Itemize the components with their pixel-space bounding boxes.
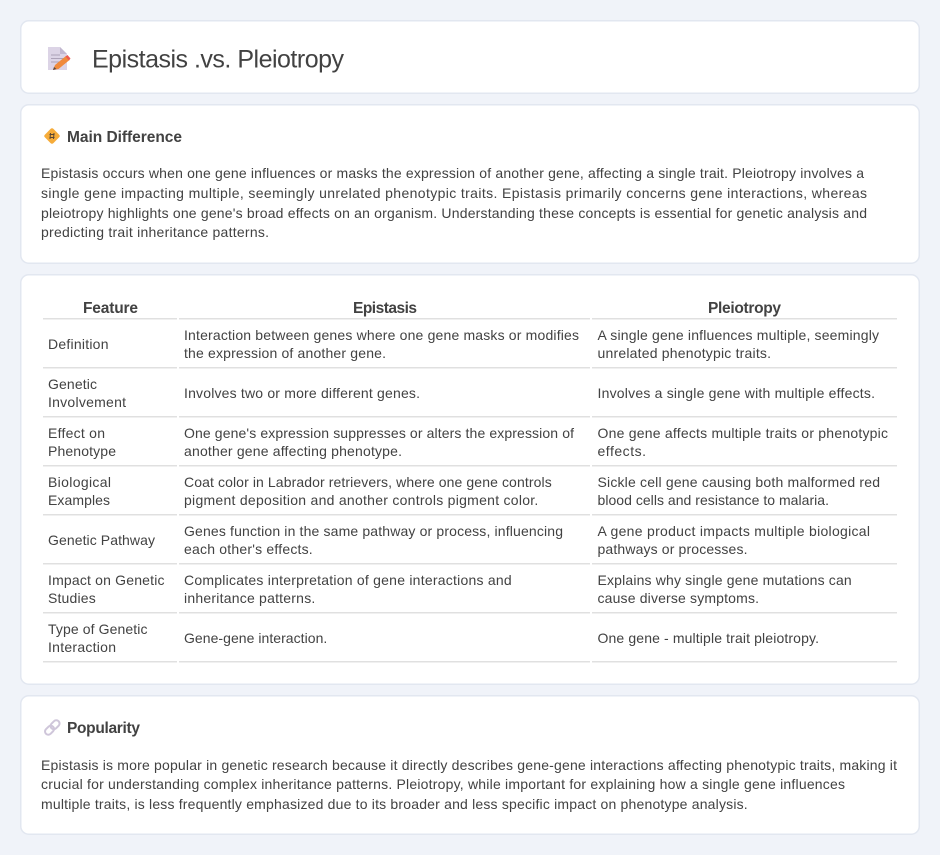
row: definition: Interaction between genes where one gene masks or modifies — [184, 327, 579, 343]
row: biological examples — [48, 474, 880, 508]
title: Epistasis .vs. Pleiotropy — [92, 46, 344, 74]
row: genetic pathway: A gene product impacts multiple biological — [598, 523, 870, 539]
table header: Epistasis — [353, 300, 417, 317]
row: definition: the expression of another gene. — [184, 345, 386, 361]
row: type of genetic interaction — [48, 621, 819, 655]
row: genetic involvement: Involves a single gene with multiple effects. — [598, 385, 875, 401]
icon: chain link — [44, 719, 61, 736]
row: genetic pathway — [48, 523, 870, 557]
row: definition — [48, 327, 879, 361]
row: genetic pathway: each other's effects. — [184, 541, 313, 557]
row: biological examples: Examples — [48, 492, 110, 508]
row: effect on phenotype — [48, 425, 888, 459]
text block: popularity — [41, 757, 897, 812]
row: genetic involvement: Involvement — [48, 394, 126, 410]
table header: Pleiotropy — [708, 300, 781, 317]
row: type of genetic interaction: Type of Genetic — [48, 621, 148, 637]
table header: Feature — [83, 300, 138, 317]
row: biological examples: Coat color in Labrador retrievers, where one gene controls — [184, 474, 552, 490]
heading: popularity: Popularity — [67, 720, 140, 737]
row: genetic pathway: Genetic Pathway — [48, 532, 155, 548]
row: definition: Definition — [48, 336, 108, 352]
row: definition: A single gene influences multiple, seemingly — [598, 327, 879, 343]
text block: main difference: pleiotropy highlights one gene's broad effects on an organism. Understanding these concepts is essential for genetic analysis and — [41, 205, 867, 221]
row: biological examples: blood cells and resistance to malaria. — [598, 492, 829, 508]
row: impact on genetic studies: inheritance patterns. — [184, 590, 315, 606]
row: type of genetic interaction: One gene - multiple trait pleiotropy. — [598, 630, 819, 646]
row: genetic pathway: Genes function in the same pathway or process, influencing — [184, 523, 563, 539]
row: biological examples: pigment deposition and another controls pigment color. — [184, 492, 538, 508]
panel: comparison table — [21, 275, 919, 684]
row: effect on phenotype: another gene affecting phenotype. — [184, 443, 402, 459]
row: biological examples: Sickle cell gene causing both malformed red — [598, 474, 880, 490]
text block: main difference — [41, 165, 867, 240]
row: genetic involvement: Genetic — [48, 376, 97, 392]
table header — [83, 300, 781, 317]
row: effect on phenotype: Effect on — [48, 425, 105, 441]
row: effect on phenotype: effects. — [598, 443, 646, 459]
row: genetic involvement — [48, 376, 875, 410]
table rules — [43, 318, 897, 662]
text block: popularity: Epistasis is more popular in genetic research because it directly describes gene-gene interactions affecting phenotypic traits, making it — [41, 757, 897, 773]
text block: popularity: crucial for understanding complex inheritance patterns. Pleiotropy, while important for explaining how a single gene influences — [41, 776, 845, 792]
row: effect on phenotype: One gene's expression suppresses or alters the expression of — [184, 425, 574, 441]
row: impact on genetic studies: cause diverse symptoms. — [598, 590, 759, 606]
row: biological examples: Biological — [48, 474, 111, 490]
row: impact on genetic studies: Studies — [48, 590, 96, 606]
icon: document with pencil — [48, 47, 70, 70]
row: effect on phenotype: One gene affects multiple traits or phenotypic — [598, 425, 888, 441]
panel: header — [21, 21, 919, 93]
heading: main difference: Main Difference — [67, 129, 182, 146]
row: impact on genetic studies: Impact on Genetic — [48, 572, 164, 588]
row: definition: unrelated phenotypic traits. — [598, 345, 771, 361]
row: genetic involvement: Involves two or more different genes. — [184, 385, 420, 401]
text block: main difference: single gene impacting multiple, seemingly unrelated phenotypic traits. Epistasis primarily concerns gene interactions, whereas — [41, 185, 867, 201]
text block: main difference: Epistasis occurs when one gene influences or masks the expression of another gene, affecting a single trait. Pleiotropy involves a — [41, 165, 864, 181]
row: impact on genetic studies: Complicates interpretation of gene interactions and — [184, 572, 512, 588]
row: type of genetic interaction: Interaction — [48, 639, 116, 655]
text block: popularity: multiple traits, is less frequently emphasized due to its broader and less specific impact on phenotype analysis. — [41, 796, 748, 812]
row: impact on genetic studies: Explains why single gene mutations can — [598, 572, 852, 588]
row: impact on genetic studies — [48, 572, 852, 606]
icon: warning diamond — [44, 128, 60, 144]
panel: main difference — [21, 105, 919, 263]
text block: main difference: predicting trait inheritance patterns. — [41, 224, 269, 240]
row: effect on phenotype: Phenotype — [48, 443, 116, 459]
row: genetic pathway: pathways or processes. — [598, 541, 748, 557]
row: type of genetic interaction: Gene-gene interaction. — [184, 630, 327, 646]
panel: popularity — [21, 696, 919, 834]
